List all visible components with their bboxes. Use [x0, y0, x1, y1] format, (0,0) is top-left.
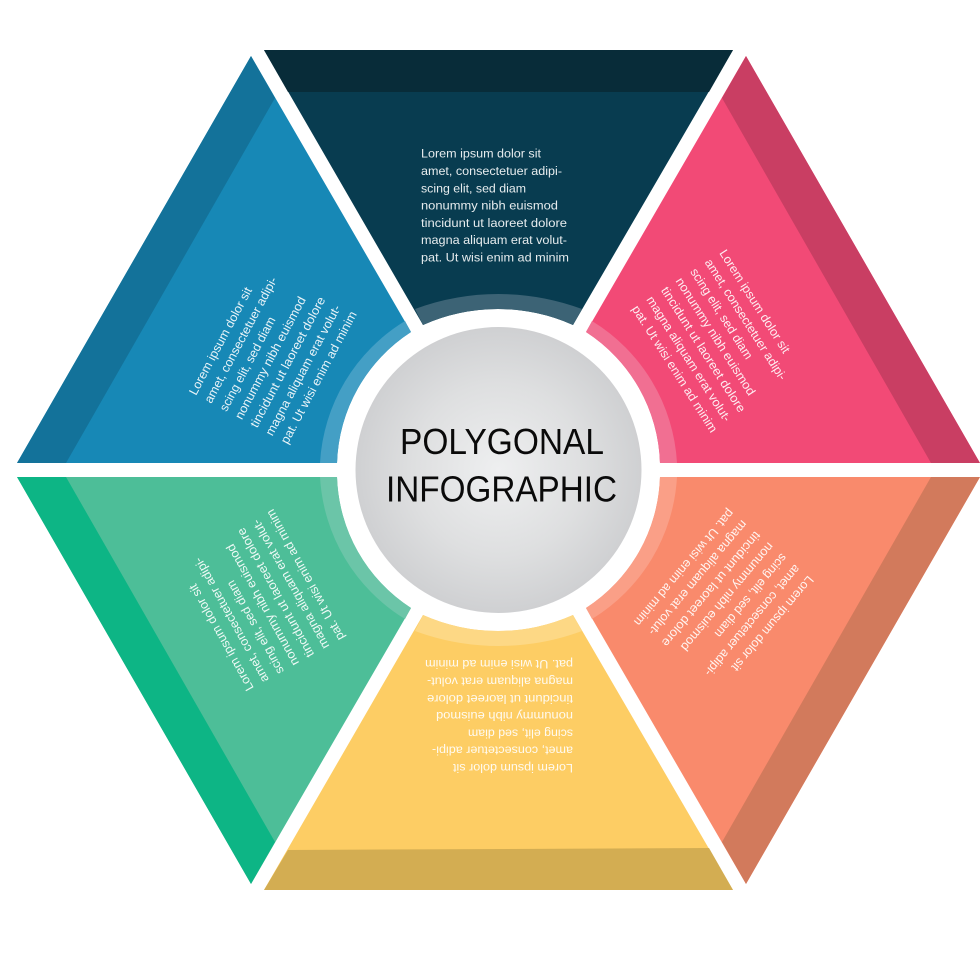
- text block: nonummy nibh euismod: [421, 199, 558, 213]
- text block: tincidunt ut laoreet dolore: [658, 284, 748, 415]
- text block: tincidunt ut laoreet dolore: [234, 525, 317, 660]
- text block: nonummy nibh euismod: [678, 540, 777, 654]
- inner arc band: [586, 321, 677, 463]
- text block: amet, consectetuer adipi-: [202, 274, 280, 406]
- text block: [425, 657, 573, 775]
- yellow dark strip: [264, 848, 733, 890]
- panel: lower right coral: [586, 477, 980, 884]
- text block: nonummy nibh euismod: [232, 294, 309, 422]
- text block: Lorem ipsum dolor sit: [716, 247, 793, 356]
- text block: magna aliquam erat volut-: [263, 303, 344, 438]
- text block: Lorem ipsum dolor sit: [452, 761, 573, 775]
- top dark strip: [264, 50, 733, 92]
- text block: [631, 506, 816, 695]
- text block: [186, 260, 360, 446]
- text block: magna aliquam erat volut-: [646, 517, 750, 638]
- inner arc band: [415, 294, 582, 325]
- text block: magna aliquam erat volut-: [249, 517, 332, 651]
- text block: Lorem ipsum dolor sit: [421, 147, 542, 161]
- text block: nonummy nibh euismod: [223, 541, 302, 668]
- panel: bottom yellow: [264, 615, 733, 890]
- title: INFOGRAPHIC: [386, 468, 617, 510]
- panel: top dark navy: [264, 50, 733, 325]
- text block: nonummy nibh euismod: [673, 275, 758, 398]
- text block: Lorem ipsum dolor sit: [186, 284, 255, 397]
- text block: scing elit, sed diam: [468, 726, 573, 740]
- text block: pat. Ut wisi enim ad minim: [263, 507, 347, 643]
- text block: scing elit, sed diam: [712, 551, 790, 640]
- pink dark strip: [722, 56, 980, 463]
- panel: lower left green: [17, 477, 411, 884]
- inner arc band: [320, 321, 411, 463]
- title: POLYGONAL: [400, 421, 604, 462]
- text block: magna aliquam erat volut-: [644, 294, 734, 424]
- text block: pat. Ut wisi enim ad minim: [631, 506, 737, 629]
- text block: amet, consectetuer adipi-: [191, 555, 272, 685]
- text block: pat. Ut wisi enim ad minim: [629, 303, 720, 435]
- text block: magna aliquam erat volut-: [421, 233, 567, 247]
- text block: amet, consectetuer adipi-: [702, 256, 789, 383]
- coral dark strip: [722, 477, 980, 884]
- text block: pat. Ut wisi enim ad minim: [278, 309, 360, 446]
- text block: [629, 247, 808, 435]
- text block: amet, consectetuer adipi-: [421, 164, 562, 178]
- inner arc band: [320, 477, 411, 619]
- text block: amet, consectetuer adipi-: [702, 562, 803, 679]
- text block: Lorem ipsum dolor sit: [728, 573, 816, 674]
- text block: pat. Ut wisi enim ad minim: [421, 250, 569, 264]
- text block: scing elit, sed diam: [421, 181, 526, 195]
- panel: upper right pink: [586, 56, 980, 463]
- inner arc band: [586, 477, 677, 619]
- text block: tincidunt ut laoreet dolore: [421, 216, 567, 230]
- text block: scing elit, sed diam: [687, 266, 756, 362]
- blue dark strip: [17, 56, 275, 463]
- text block: magna aliquam erat volut-: [427, 674, 573, 688]
- panel: upper left blue: [17, 56, 411, 463]
- inner arc band: [415, 615, 582, 646]
- text block: amet, consectetuer adipi-: [432, 744, 573, 758]
- center circle with title: [356, 327, 642, 613]
- text block: scing elit, sed diam: [224, 578, 287, 677]
- title: [386, 421, 617, 510]
- text block: [421, 147, 569, 264]
- text block: tincidunt ut laoreet dolore: [659, 529, 763, 650]
- text block: [173, 507, 347, 693]
- text block: tincidunt ut laoreet dolore: [247, 294, 328, 430]
- text block: scing elit, sed diam: [217, 314, 278, 414]
- green dark strip: [17, 477, 275, 884]
- text block: pat. Ut wisi enim ad minim: [425, 657, 573, 671]
- text block: Lorem ipsum dolor sit: [186, 581, 257, 693]
- text block: nonummy nibh euismod: [436, 709, 573, 723]
- text block: tincidunt ut laoreet dolore: [427, 692, 573, 706]
